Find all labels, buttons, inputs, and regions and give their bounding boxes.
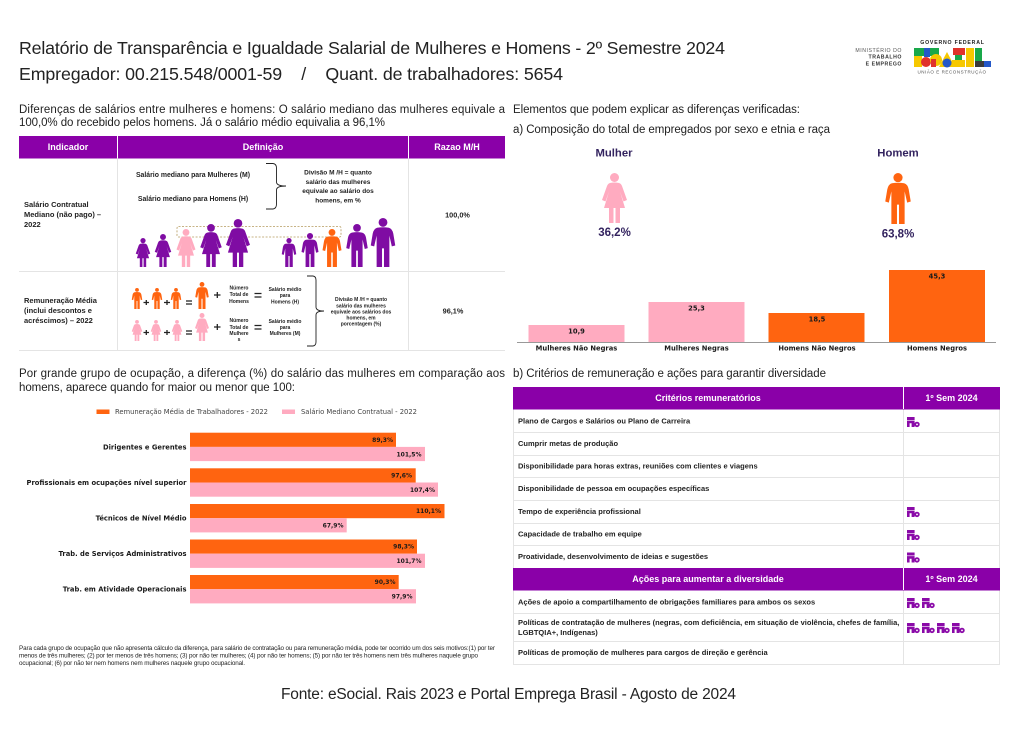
chart legend: Remuneração Média de Trabalhadores - 2022 xyxy=(115,408,268,416)
lista de critérios: Disponibilidade para horas extras, reuniões com clientes e viagens xyxy=(518,462,758,470)
row: remuneração média: (inclui descontos e xyxy=(24,306,92,315)
chart legend: Salário Mediano Contratual - 2022 xyxy=(301,408,417,416)
bar chart: diferença por grupo de ocupação: Trab. de Serviços Administrativos xyxy=(58,550,186,558)
panel: composição mulher: Mulher xyxy=(595,148,633,160)
text: elementos explicativos: a) Composição do total de empregados por sexo e etnia e raça xyxy=(513,124,831,136)
row: salário contratual mediano xyxy=(24,164,470,267)
header: ações para diversidade: 1º Sem 2024 xyxy=(925,574,978,584)
lista de critérios: Cumprir metas de produção xyxy=(518,439,618,448)
bar chart: diferença por grupo de ocupação: 89,3% xyxy=(372,437,393,444)
bar chart: diferença por grupo de ocupação: 110,1% xyxy=(416,508,441,515)
lista de critérios: Capacidade de trabalho em equipe xyxy=(518,530,642,538)
icons: ações xyxy=(907,598,965,633)
row: remuneração média: Divisão M /H = quanto xyxy=(335,297,387,303)
row: salário contratual mediano: Salário mediano para Mulheres (M) xyxy=(136,172,250,179)
bar chart: diferença por grupo de ocupação xyxy=(26,433,444,603)
row: remuneração média: acréscimos) – 2022 xyxy=(24,316,93,325)
bar chart: diferença por grupo de ocupação: Profissionais em ocupações nível superior xyxy=(26,479,187,487)
panel: composição homem xyxy=(877,148,919,240)
source: Fonte: eSocial. Rais 2023 e Portal Emprega Brasil - Agosto de 2024 xyxy=(281,686,736,703)
row: remuneração média: Homens xyxy=(229,299,249,305)
chart legend xyxy=(96,408,417,416)
lista de ações xyxy=(518,598,899,657)
lista de ações: Ações de apoio a compartilhamento de obrigações familiares para ambos os sexos xyxy=(518,598,815,606)
row: salário contratual mediano: salário das mulheres xyxy=(306,179,371,186)
logo: ministério e governo federal xyxy=(855,40,991,74)
text: grande grupo de ocupação xyxy=(19,368,505,394)
row: remuneração média: Total de xyxy=(230,292,249,298)
text: critérios: b) Critérios de remuneração e ações para garantir diversidade xyxy=(513,368,826,380)
row: salário contratual mediano: Salário mediano para Homens (H) xyxy=(138,196,248,203)
bar chart: composição por sexo e raça: 10,9 xyxy=(568,328,585,336)
panel: composição mulher: 36,2% xyxy=(598,227,631,239)
row: remuneração média: para xyxy=(280,325,290,331)
bar chart: composição por sexo e raça: Mulheres Não Negras xyxy=(536,344,617,352)
table header: Razao M/H xyxy=(434,142,480,152)
bar chart: composição por sexo e raça: Homens Negros xyxy=(907,344,967,352)
lista de ações: Políticas de contratação de mulheres (negras, com deficiência, em situação de violência, chefes de família, xyxy=(518,618,899,627)
row: remuneração média: equivale aos salários dos xyxy=(331,310,392,316)
footnote: ocupacional; (6) por não ter nem homens nem mulheres naquele grupo ocupacional. xyxy=(19,660,245,667)
text: grande grupo de ocupação: Por grande grupo de ocupação, a diferença (%) do salário das mulheres em comparação aos xyxy=(19,368,505,380)
row: remuneração média: salário das mulheres xyxy=(336,304,386,310)
header: critérios remuneratórios xyxy=(513,387,1000,410)
bar chart: diferença por grupo de ocupação: Técnicos de Nível Médio xyxy=(96,514,187,522)
lista de ações: LGBTQIA+, Indígenas) xyxy=(518,628,598,637)
row: remuneração média: Mulheres (M) xyxy=(270,331,301,337)
bar chart: composição por sexo e raça: Homens Não Negros xyxy=(778,344,856,352)
header: ações para diversidade xyxy=(513,568,1000,590)
logo: ministério e governo federal: E EMPREGO xyxy=(866,62,902,68)
row: salário contratual mediano: Mediano (não pago) – xyxy=(24,210,101,219)
bar chart: diferença por grupo de ocupação: 107,4% xyxy=(410,487,435,494)
panel: composição homem: Homem xyxy=(877,148,919,160)
title: Empregador: 00.215.548/0001-59 / Quant. de trabalhadores: 5654 xyxy=(19,64,563,84)
panel: composição mulher xyxy=(595,148,633,239)
bar chart: diferença por grupo de ocupação: 90,3% xyxy=(375,579,396,586)
bar chart: composição por sexo e raça: 45,3 xyxy=(929,272,946,280)
logo: ministério e governo federal: UNIÃO E RECONSTRUÇÃO xyxy=(917,68,987,74)
footnote: menos de três mulheres; (2) por ter menos de três homens; (3) por não ter mulheres; (4) por não ter homens; (5) por não ter três homens nem três mulheres naquele grupo xyxy=(19,652,478,660)
row: remuneração média: Mulhere xyxy=(229,331,249,337)
title: Relatório de Transparência e Igualdade Salarial de Mulheres e Homens - 2º Semestre 2024 xyxy=(19,38,725,58)
bar chart: diferença por grupo de ocupação: Dirigentes e Gerentes xyxy=(103,444,186,452)
row: remuneração média: Número xyxy=(230,318,248,324)
logo: ministério e governo federal: TRABALHO xyxy=(868,54,902,60)
footnote xyxy=(19,645,495,667)
header: critérios remuneratórios: 1º Sem 2024 xyxy=(925,393,978,403)
row: salário contratual mediano: Salário Contratual xyxy=(24,200,89,209)
text: grande grupo de ocupação: homens, aparece quando for maior ou menor que 100: xyxy=(19,382,295,394)
row: salário contratual mediano: equivale ao salário dos xyxy=(302,188,374,195)
row: salário contratual mediano: 2022 xyxy=(24,220,41,229)
row: remuneração média: Número xyxy=(230,286,248,292)
table header: Indicador xyxy=(48,142,89,152)
panel: critérios e ações xyxy=(513,387,1000,664)
title xyxy=(19,38,725,84)
row: remuneração média: Salário médio xyxy=(269,287,301,293)
table header: Definição xyxy=(243,142,284,152)
row: remuneração média: s xyxy=(238,337,241,343)
row: remuneração média: porcentagem (%) xyxy=(341,322,382,328)
row: salário contratual mediano: homens, em % xyxy=(315,198,361,204)
row: remuneração média: homens, em xyxy=(346,316,376,322)
lista de critérios xyxy=(518,416,758,561)
icons: critérios xyxy=(907,417,920,563)
header: ações para diversidade: Ações para aumentar a diversidade xyxy=(632,574,784,584)
row: remuneração média xyxy=(24,276,464,346)
bar chart: composição por sexo e raça: 18,5 xyxy=(809,316,826,324)
bar chart: diferença por grupo de ocupação: 101,5% xyxy=(396,451,422,458)
row: remuneração média: Homens (H) xyxy=(271,300,299,306)
text: diferenças de salários: 100,0% do recebido pelos homens. Já o salário médio equivalia a 96,1% xyxy=(19,117,385,129)
bar chart: diferença por grupo de ocupação: 97,6% xyxy=(391,472,412,480)
lista de critérios: Plano de Cargos e Salários ou Plano de Carreira xyxy=(518,416,691,426)
lista de critérios: Tempo de experiência profissional xyxy=(518,507,641,516)
bar chart: composição por sexo e raça: Mulheres Negras xyxy=(664,344,729,352)
row: salário contratual mediano: Divisão M /H = quanto xyxy=(304,170,372,176)
bar chart: composição por sexo e raça: 25,3 xyxy=(688,304,705,312)
bar chart: diferença por grupo de ocupação: 101,7% xyxy=(396,558,422,565)
text: elementos explicativos xyxy=(513,104,831,136)
row: remuneração média: para xyxy=(280,293,290,299)
footnote: Para cada grupo de ocupação que não apresenta cálculo da diferença, para salário de contratação ou para remuneração média, pode ter ocorrido um dos seis motivos:(1) por ter xyxy=(19,645,495,652)
text: diferenças de salários xyxy=(19,104,506,129)
lista de ações: Políticas de promoção de mulheres para cargos de direção e gerência xyxy=(518,648,769,657)
text: elementos explicativos: Elementos que podem explicar as diferenças verificadas: xyxy=(513,104,800,116)
row: remuneração média: 96,1% xyxy=(443,306,464,316)
bar chart: diferença por grupo de ocupação: Trab. em Atividade Operacionais xyxy=(63,586,186,594)
bar chart: diferença por grupo de ocupação: 67,9% xyxy=(323,522,344,529)
bar chart: composição por sexo e raça xyxy=(517,270,996,352)
row: remuneração média: Salário médio xyxy=(269,319,301,325)
row: remuneração média: Remuneração Média xyxy=(24,296,98,305)
text: diferenças de salários: Diferenças de salários entre mulheres e homens: O salário mediano das mulheres equivale a xyxy=(19,104,506,116)
logo: ministério e governo federal: MINISTÉRIO DO xyxy=(855,47,902,54)
lista de critérios: Disponibilidade de pessoa em ocupações específicas xyxy=(518,484,709,493)
bar chart: diferença por grupo de ocupação: 97,9% xyxy=(392,593,412,600)
lista de critérios: Proatividade, desenvolvimento de ideias e sugestões xyxy=(518,552,708,561)
bar chart: diferença por grupo de ocupação: 98,3% xyxy=(393,544,414,550)
panel: composição homem: 63,8% xyxy=(882,228,914,240)
table header xyxy=(19,136,505,158)
row: remuneração média: Total de xyxy=(230,325,249,331)
header: critérios remuneratórios: Critérios remuneratórios xyxy=(655,393,761,403)
panel: tabela de indicadores xyxy=(19,136,505,350)
logo: ministério e governo federal: GOVERNO FEDERAL xyxy=(920,40,985,46)
row: salário contratual mediano: 100,0% xyxy=(445,210,470,220)
